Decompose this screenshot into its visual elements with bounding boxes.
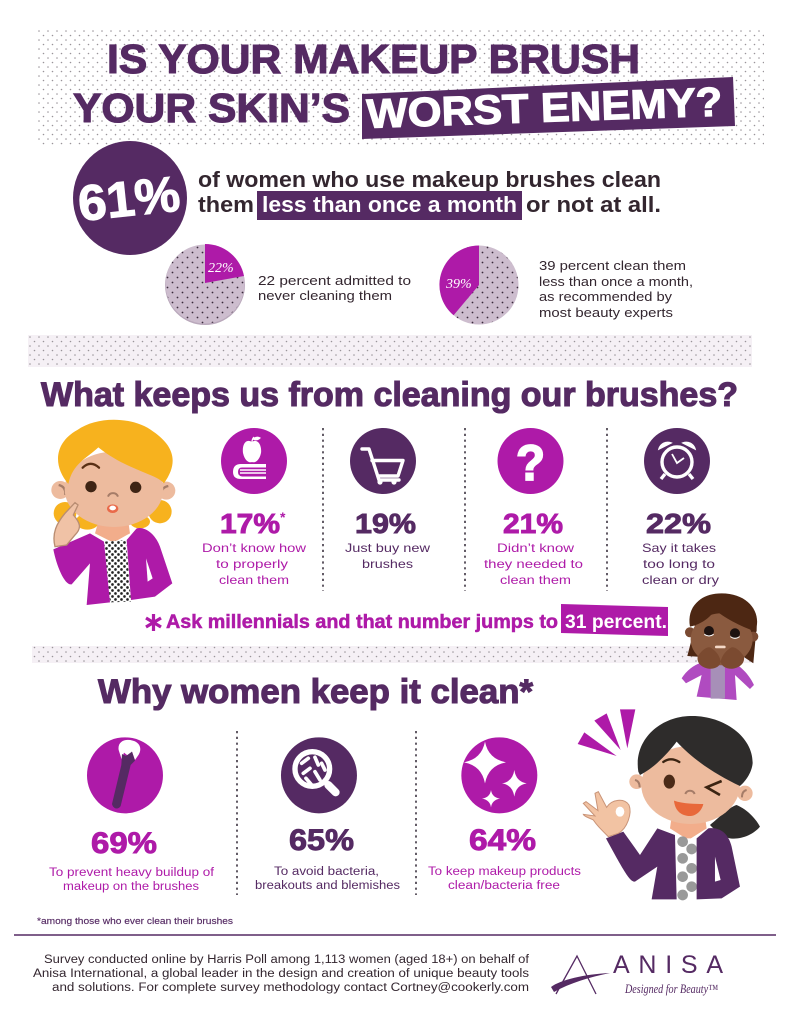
pie chart: 22 percent	[165, 244, 245, 325]
millennials callout: Ask millennials and that number jumps to	[166, 612, 558, 633]
stat: 21 percent: 21%	[503, 508, 563, 539]
stat: 22 percent: too long to	[643, 557, 715, 571]
stat: 21 percent: Didn’t know	[497, 541, 574, 555]
text: 22 percent: never cleaning them	[258, 288, 392, 303]
stat: 17 percent: *	[280, 509, 286, 525]
illustration: blonde woman thinking	[51, 420, 175, 605]
icon: question mark	[498, 428, 564, 494]
survey methodology text: and solutions. For complete survey methodology contact Cortney@cookerly.com	[52, 982, 529, 994]
icon: magnifier with bacteria	[281, 737, 357, 813]
stat: 22 percent: clean or dry	[642, 573, 719, 587]
stat: 21 percent	[484, 508, 583, 587]
text: 39 percent	[539, 258, 693, 320]
stat: 69 percent: makeup on the brushes	[63, 881, 199, 893]
heading: why women keep it clean: Why women keep it clean*	[98, 673, 534, 711]
stat: 17 percent: clean them	[219, 573, 289, 587]
millennials callout: 31 percent.	[565, 612, 667, 633]
headline statistic text	[198, 167, 661, 220]
stat: 64 percent: clean/bacteria free	[448, 880, 560, 892]
stat: 69 percent: To prevent heavy buildup of	[49, 867, 215, 879]
headline statistic text: of women who use makeup brushes clean	[198, 167, 661, 192]
heading: what keeps us: What keeps us from cleaning our brushes?	[41, 376, 738, 414]
stat: 17 percent: to properly	[216, 557, 288, 571]
61 percent circle: 61%	[75, 166, 183, 232]
dotted divider strip	[32, 646, 754, 663]
stat: 65 percent: breakouts and blemishes	[255, 880, 400, 892]
stat: 19 percent: Just buy new	[345, 541, 430, 555]
stat: 65 percent: 65%	[289, 824, 354, 857]
illustration: worried woman	[682, 593, 758, 700]
headline statistic text: or not at all.	[526, 192, 661, 217]
stat: 21 percent: clean them	[500, 573, 571, 587]
stat: 19 percent: brushes	[362, 557, 413, 571]
headline statistic text: less than once a month	[262, 192, 517, 217]
Anisa logo: Designed for Beauty™	[624, 982, 718, 996]
pie chart: 39 percent: 39%	[445, 277, 472, 292]
icon: sparkles	[461, 737, 537, 813]
stat: 22 percent: 22%	[646, 508, 711, 539]
footnote: *among those who ever clean their brushes	[37, 916, 233, 927]
icon: alarm clock	[644, 428, 710, 494]
pie chart: 39 percent	[439, 245, 518, 324]
text: 39 percent: as recommended by	[539, 289, 673, 304]
dividers: row one	[323, 428, 607, 591]
icon: shopping cart	[350, 428, 416, 494]
millennials callout	[146, 604, 668, 636]
title: YOUR SKIN’S	[73, 85, 350, 131]
text: 22 percent: 22 percent admitted to	[258, 273, 411, 288]
stat: 64 percent: To keep makeup products	[428, 866, 581, 878]
icon: makeup brush	[87, 737, 163, 813]
icon: question mark: ?	[516, 435, 545, 491]
title	[73, 36, 735, 139]
stat: 65 percent: To avoid bacteria,	[274, 866, 379, 878]
stat: 21 percent: they needed to	[484, 557, 583, 571]
stat: 17 percent: 17%	[220, 508, 280, 539]
dividers: row two	[237, 731, 416, 895]
headline statistic text: them	[198, 192, 254, 217]
stat: 22 percent: Say it takes	[642, 541, 716, 555]
title banner background	[37, 29, 764, 145]
Anisa logo: ANISA	[613, 951, 723, 979]
text: 39 percent: 39 percent clean them	[539, 258, 686, 273]
illustration: winking woman with ok hand	[578, 709, 760, 900]
stat: 17 percent: Don’t know how	[202, 541, 306, 555]
dotted divider strip	[28, 335, 752, 367]
footer rule	[14, 934, 776, 936]
stat: 69 percent: 69%	[91, 827, 157, 860]
text: 39 percent: most beauty experts	[539, 305, 674, 320]
stat: 22 percent	[642, 508, 719, 587]
text: 39 percent: less than once a month,	[539, 274, 693, 289]
stat: 19 percent	[345, 508, 430, 571]
survey methodology text: Anisa International, a global leader in the design and creation of unique beauty tools	[33, 968, 529, 980]
survey methodology text	[33, 954, 530, 994]
stat: 64 percent	[428, 824, 581, 892]
stat: 65 percent	[255, 824, 400, 892]
icon: apple on books	[221, 428, 287, 494]
text: 22 percent	[258, 273, 411, 303]
title: IS YOUR MAKEUP BRUSH	[107, 36, 640, 82]
Anisa logo	[551, 951, 723, 996]
survey methodology text: Survey conducted online by Harris Poll among 1,113 women (aged 18+) on behalf of	[44, 954, 530, 966]
stat: 69 percent	[49, 827, 215, 893]
stat: 19 percent: 19%	[355, 508, 416, 539]
pie chart: 22 percent: 22%	[208, 261, 234, 276]
title: WORST ENEMY?	[366, 79, 723, 137]
stat: 17 percent	[202, 508, 306, 587]
stat: 64 percent: 64%	[469, 824, 536, 857]
61 percent circle	[73, 141, 187, 255]
